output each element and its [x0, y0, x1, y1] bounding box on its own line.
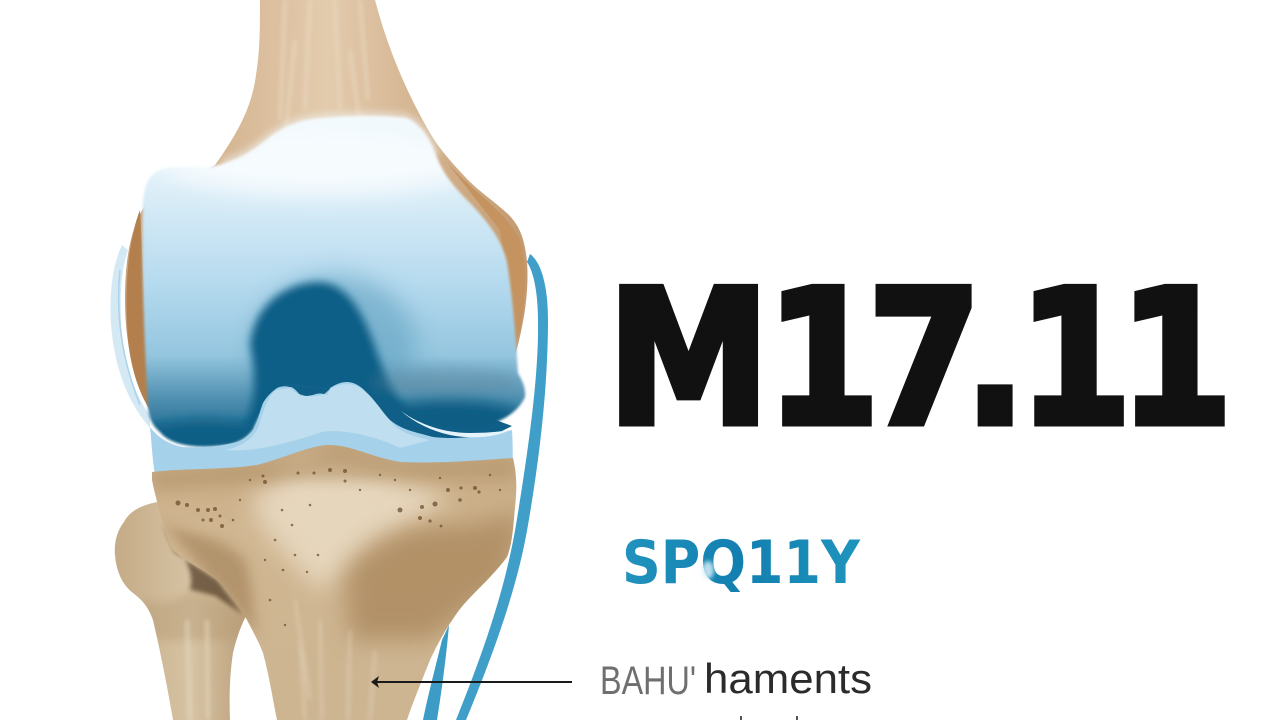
- callout label: ligaments: haments: [704, 655, 872, 702]
- meniscus: [150, 382, 513, 480]
- cartilage soft upper edge: [222, 116, 436, 164]
- femur shaft and condyles: [125, 0, 528, 410]
- notch shadow: [235, 276, 433, 431]
- leader arrow: [371, 676, 572, 688]
- tibia bone pores: [176, 468, 501, 626]
- tibia: [152, 445, 525, 720]
- ligament: medial pale band: [110, 245, 150, 428]
- femoral cartilage: [130, 110, 530, 456]
- knee joint illustration: [110, 0, 548, 720]
- tibia highlight: [250, 465, 450, 590]
- heading: code M17.11: M17.11: [607, 251, 1233, 468]
- fibula: [114, 502, 246, 720]
- tibia shadow: [345, 514, 525, 640]
- joint space shadow: [245, 380, 512, 445]
- clipped next line fragments: [740, 716, 798, 720]
- callout label: ligaments: BAHU': [600, 659, 696, 703]
- callout label: ligaments: [600, 655, 872, 703]
- ligament: lateral blue cord: [456, 254, 548, 720]
- ligament: inner blue band: [423, 625, 449, 720]
- subheading: SPQ11Y: SPQ11Y: [622, 528, 861, 598]
